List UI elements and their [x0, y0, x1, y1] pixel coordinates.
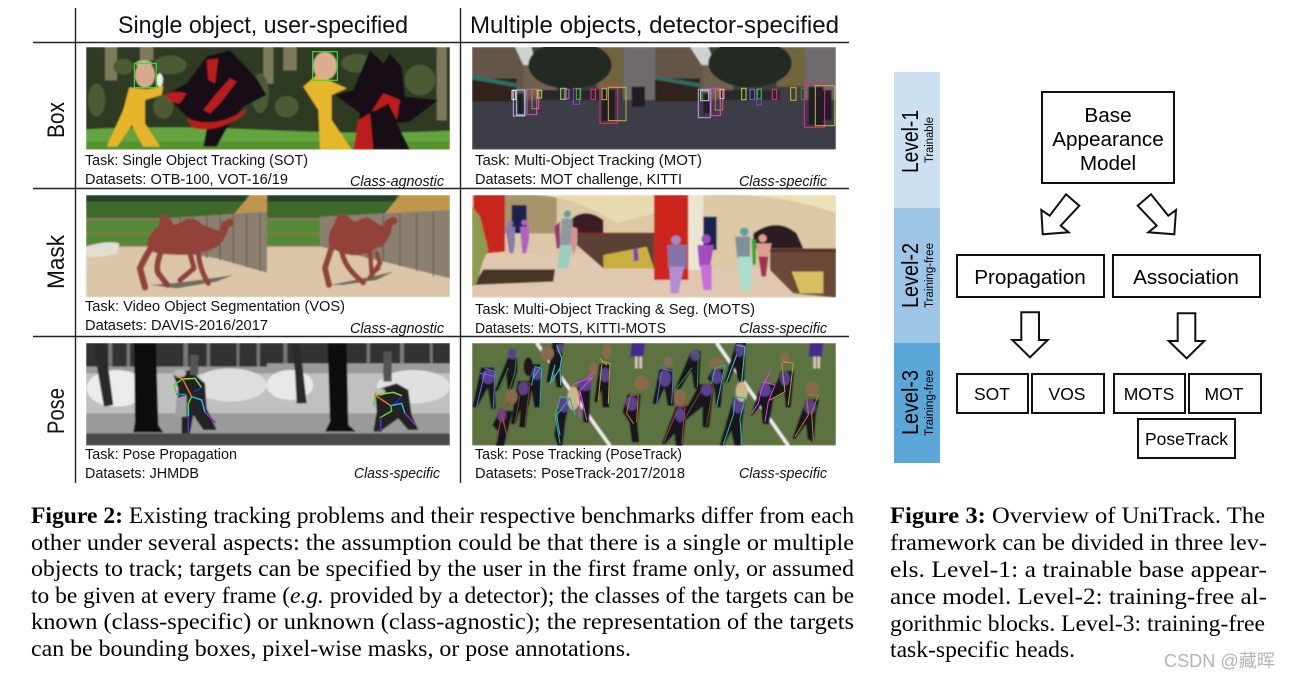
level band: level 1: Level-1 [897, 110, 923, 173]
task text: PoseTrack: Class-specific [739, 466, 828, 482]
caption: figure 3: ance model. Level-2: training-free al- [890, 584, 1267, 610]
image: multi-object tracking frames [472, 39, 836, 150]
arrow: to propagation [1041, 194, 1079, 234]
box: base appearance model: Model [1080, 152, 1136, 175]
image: multi-object tracking and segmentation frames [472, 195, 836, 298]
row label: pose: Pose [43, 388, 70, 434]
box: base appearance model: Appearance [1052, 128, 1164, 151]
task text: VOS [85, 299, 445, 337]
box: VOS: VOS [1049, 384, 1085, 404]
watermark: CSDN @藏晖 [1164, 651, 1275, 671]
arrow: to association [1138, 194, 1176, 234]
caption: figure 2: other under several aspects: the assumption could be that there is a single or multiple [31, 530, 854, 556]
task text: pose propagation: Datasets: JHMDB [85, 466, 199, 482]
box: association: Association [1133, 266, 1239, 289]
task text: MOT: Task: Multi-Object Tracking (MOT) [475, 153, 702, 169]
box: SOT: SOT [974, 384, 1010, 404]
task text: pose propagation [85, 447, 441, 482]
row label: box: Box [43, 102, 70, 138]
caption: figure 2: objects to track; targets can be specified by the user in the first frame only, or assumed [31, 556, 854, 582]
level band: level 1: Trainable [924, 117, 936, 163]
box: VOS [1032, 374, 1104, 413]
box: propagation [957, 255, 1104, 297]
caption: figure 3 [890, 503, 1267, 663]
arrow: propagation to heads [1012, 312, 1048, 357]
row label: mask: Mask [43, 234, 70, 289]
level band: level 3: Level-3 [897, 370, 923, 435]
frame 1 monster [165, 50, 267, 147]
task text: MOTS: Class-specific [739, 321, 828, 337]
task text: PoseTrack [475, 447, 828, 482]
caption: figure 3: task-specific heads. [890, 637, 1075, 663]
task text: MOTS [475, 302, 828, 337]
box: MOTS [1114, 374, 1185, 413]
task text: MOTS: Datasets: MOTS, KITTI-MOTS [475, 321, 666, 337]
level band: level 2: Training-free [924, 243, 936, 308]
caption: figure 3: framework can be divided in three lev- [890, 530, 1267, 556]
task text: SOT: Task: Single Object Tracking (SOT) [85, 153, 308, 169]
task text: pose propagation: Class-specific [354, 466, 441, 482]
caption: figure 3: gorithmic blocks. Level-3: training-free [890, 611, 1265, 637]
box: MOT [1189, 374, 1261, 413]
image: pose propagation frames [86, 343, 450, 446]
caption: figure 2: can be bounding boxes, pixel-wise masks, or pose annotations. [31, 636, 631, 662]
level band: level 2: Level-2 [897, 243, 923, 308]
caption: figure 2: to be given at every frame (e.g. provided by a detector); the classes of the targets can be [31, 583, 854, 609]
column heading: single object: Single object, user-specified [118, 12, 408, 39]
arrow: association to heads [1169, 313, 1204, 358]
table grid lines [33, 8, 849, 483]
task text: SOT [85, 153, 445, 190]
task text: SOT: Class-agnostic [350, 174, 445, 190]
task text: MOT [475, 153, 828, 190]
caption: figure 2 [31, 503, 854, 662]
task text: MOT: Class-specific [739, 174, 828, 190]
level band: level 1 [894, 72, 940, 208]
image: video object segmentation frames [86, 195, 450, 297]
level band: level 3: Training-free [924, 370, 936, 436]
caption: figure 3: Figure 3: Overview of UniTrack. The [890, 503, 1265, 529]
caption: figure 3: els. Level-1: a trainable base appear- [890, 557, 1267, 583]
task text: pose propagation: Task: Pose Propagation [85, 447, 237, 463]
level band: level 2 [894, 208, 940, 343]
box: MOTS: MOTS [1124, 384, 1174, 404]
box: base appearance model [1042, 92, 1174, 183]
frame 2 monster [335, 50, 438, 150]
task text: VOS: Task: Video Object Segmentation (VOS) [85, 299, 345, 315]
box: PoseTrack [1138, 419, 1235, 458]
task text: PoseTrack: Task: Pose Tracking (PoseTrack) [475, 447, 682, 463]
task text: SOT: Datasets: OTB-100, VOT-16/19 [85, 172, 288, 188]
task text: PoseTrack: Datasets: PoseTrack-2017/2018 [475, 466, 685, 482]
box: SOT [957, 374, 1028, 413]
task text: VOS: Class-agnostic [350, 321, 445, 337]
caption: figure 2: known (class-specific) or unknown (class-agnostic); the representation of the targets [31, 609, 854, 635]
caption: figure 2: Figure 2: Existing tracking problems and their respective benchmarks differ from each [31, 503, 854, 529]
task text: MOTS: Task: Multi-Object Tracking & Seg. (MOTS) [475, 302, 755, 318]
box: PoseTrack: PoseTrack [1145, 429, 1228, 449]
image: pose tracking frames [472, 343, 836, 446]
task text: VOS: Datasets: DAVIS-2016/2017 [85, 318, 268, 334]
column heading: multiple objects: Multiple objects, detector-specified [470, 12, 839, 39]
box: propagation: Propagation [974, 266, 1086, 289]
box: MOT: MOT [1205, 384, 1244, 404]
image: single object tracking frames [86, 47, 450, 150]
box: base appearance model: Base [1084, 104, 1132, 127]
frame 2 baby [303, 75, 352, 150]
frame 1 baby [107, 86, 163, 147]
level band: level 3 [894, 343, 940, 463]
task text: MOT: Datasets: MOT challenge, KITTI [475, 172, 682, 188]
box: association [1113, 255, 1260, 297]
